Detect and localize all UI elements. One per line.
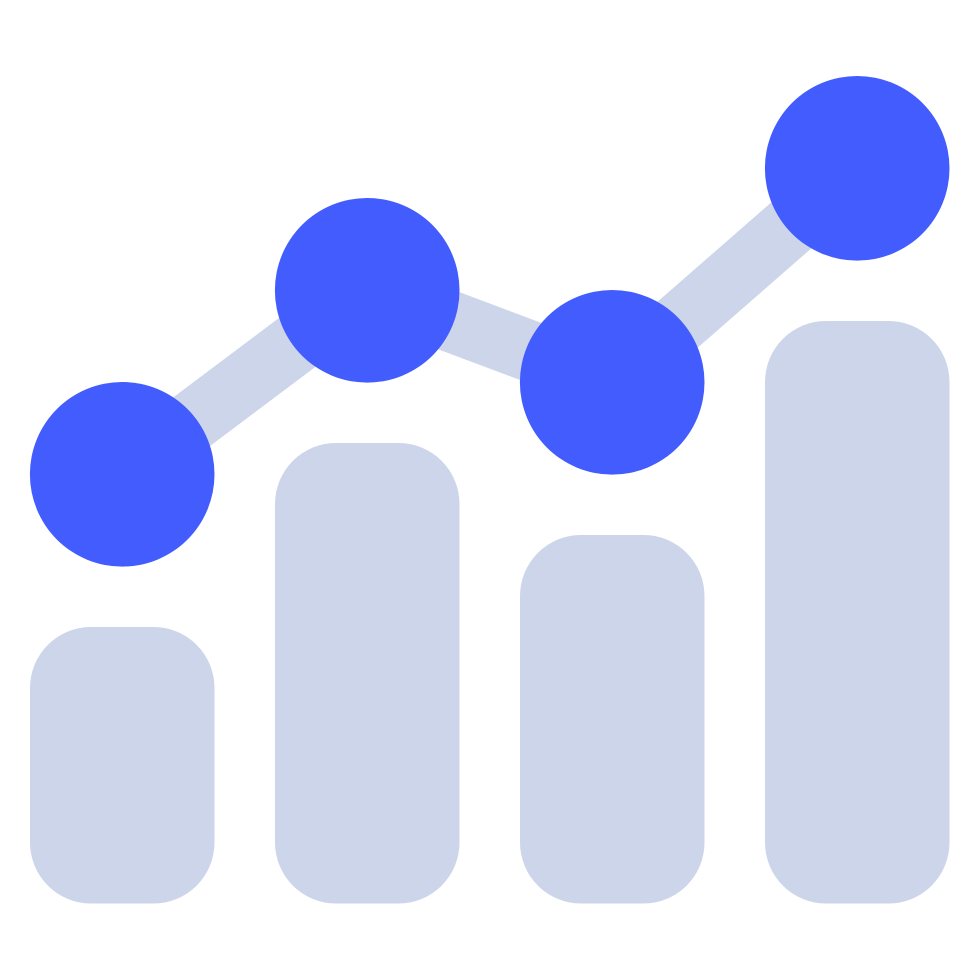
data point 2 [275,198,460,383]
bar 3 [520,535,704,904]
bar 4 [765,321,950,904]
data point 4 [765,76,950,261]
bar 1 [30,627,214,904]
bar 2 [275,443,460,904]
data point 3 [520,290,704,475]
data point 1 [30,382,214,567]
trend line [122,168,857,474]
